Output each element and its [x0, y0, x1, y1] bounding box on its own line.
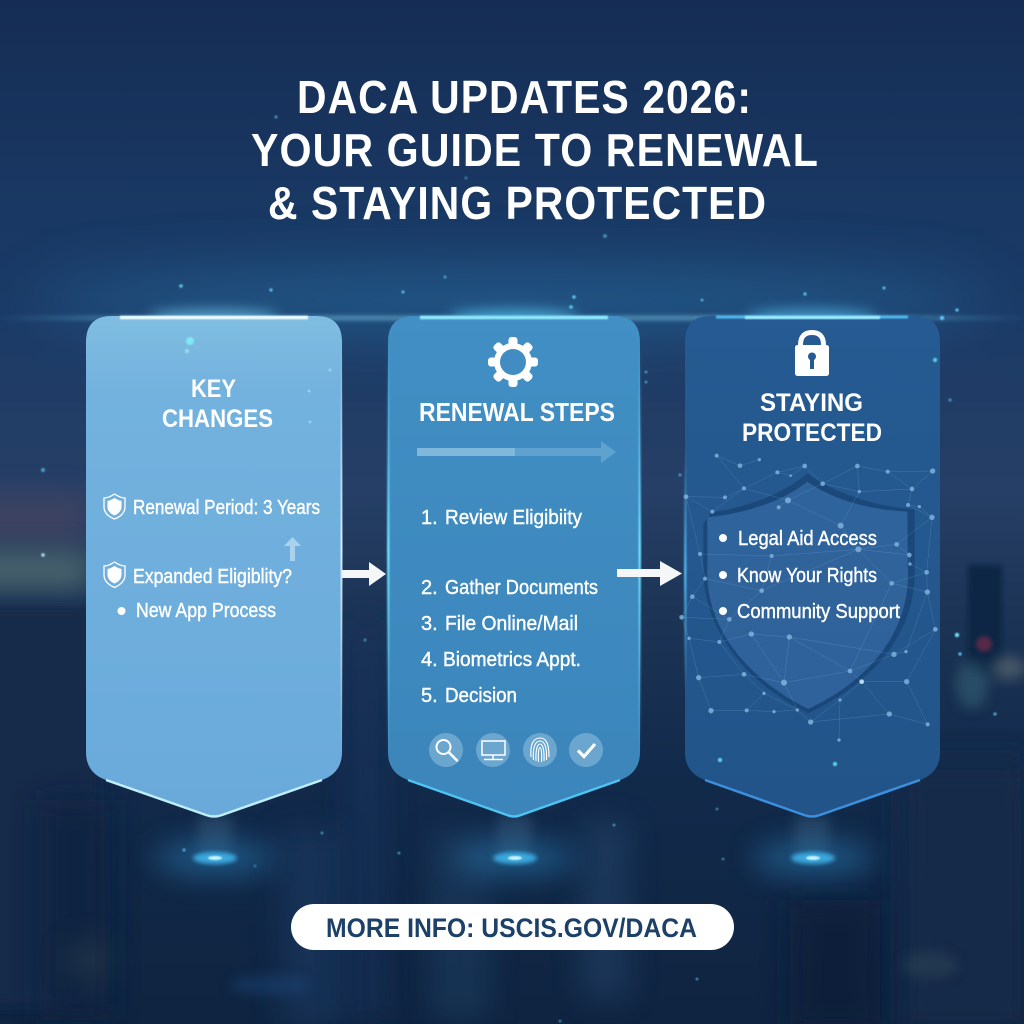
- heading: key changes: CHANGES: [162, 405, 273, 433]
- heading: staying protected: STAYING: [760, 389, 863, 417]
- protection list: Legal Aid Access: [738, 528, 877, 550]
- protection list: Know Your Rights: [737, 565, 877, 587]
- icon: padlock: [795, 332, 829, 376]
- heading: renewal steps: RENEWAL STEPS: [419, 397, 615, 427]
- icon: shield 2: [104, 562, 125, 588]
- heading: key changes: KEY: [191, 375, 236, 403]
- step list: Biometrics Appt.: [443, 649, 581, 671]
- icon: fingerprint: [523, 733, 557, 767]
- step list: Review Eligibiity: [445, 507, 582, 529]
- title: [251, 71, 819, 229]
- progress arrow: [417, 441, 616, 463]
- text: expanded eligibility: Expanded Eligiblity?: [133, 566, 292, 588]
- panel: staying protected: [679, 309, 940, 816]
- step list: 2.: [421, 577, 438, 599]
- step list: 5.: [421, 685, 438, 707]
- panel: key changes: [86, 309, 342, 816]
- step list: [421, 507, 598, 707]
- protection list: Community Support: [737, 601, 900, 623]
- shield with network: [679, 454, 938, 742]
- title: YOUR GUIDE TO RENEWAL: [251, 124, 819, 176]
- panel: renewal steps: [387, 309, 641, 816]
- heading: staying protected: [742, 389, 882, 447]
- title: & STAYING PROTECTED: [268, 177, 767, 229]
- arrow: key changes to renewal steps: [342, 562, 386, 586]
- step list: Gather Documents: [445, 577, 598, 599]
- text: renewal period: Renewal Period: 3 Years: [133, 497, 320, 519]
- protection list: [719, 528, 900, 623]
- arrow: renewal steps to staying protected: [617, 561, 682, 586]
- icon: monitor: [476, 733, 510, 767]
- icon: check: [569, 733, 603, 767]
- call to action pill: [291, 904, 734, 950]
- step list: Decision: [445, 685, 517, 707]
- step list: File Online/Mail: [445, 613, 578, 635]
- step list: 4.: [421, 649, 438, 671]
- step list: 3.: [421, 613, 438, 635]
- icon: magnifier: [429, 733, 463, 767]
- heading: key changes: [162, 375, 273, 433]
- step list: 1.: [421, 507, 438, 529]
- bullet: new app process: New App Process: [136, 600, 276, 622]
- heading: staying protected: PROTECTED: [742, 419, 882, 447]
- icon: shield 1: [104, 494, 125, 519]
- icon: gear: [488, 337, 538, 387]
- icon: up arrow: [284, 537, 301, 561]
- call to action pill: MORE INFO: USCIS.GOV/DACA: [326, 913, 697, 943]
- title: DACA UPDATES 2026:: [297, 71, 752, 123]
- glow spots under panels: [155, 815, 873, 876]
